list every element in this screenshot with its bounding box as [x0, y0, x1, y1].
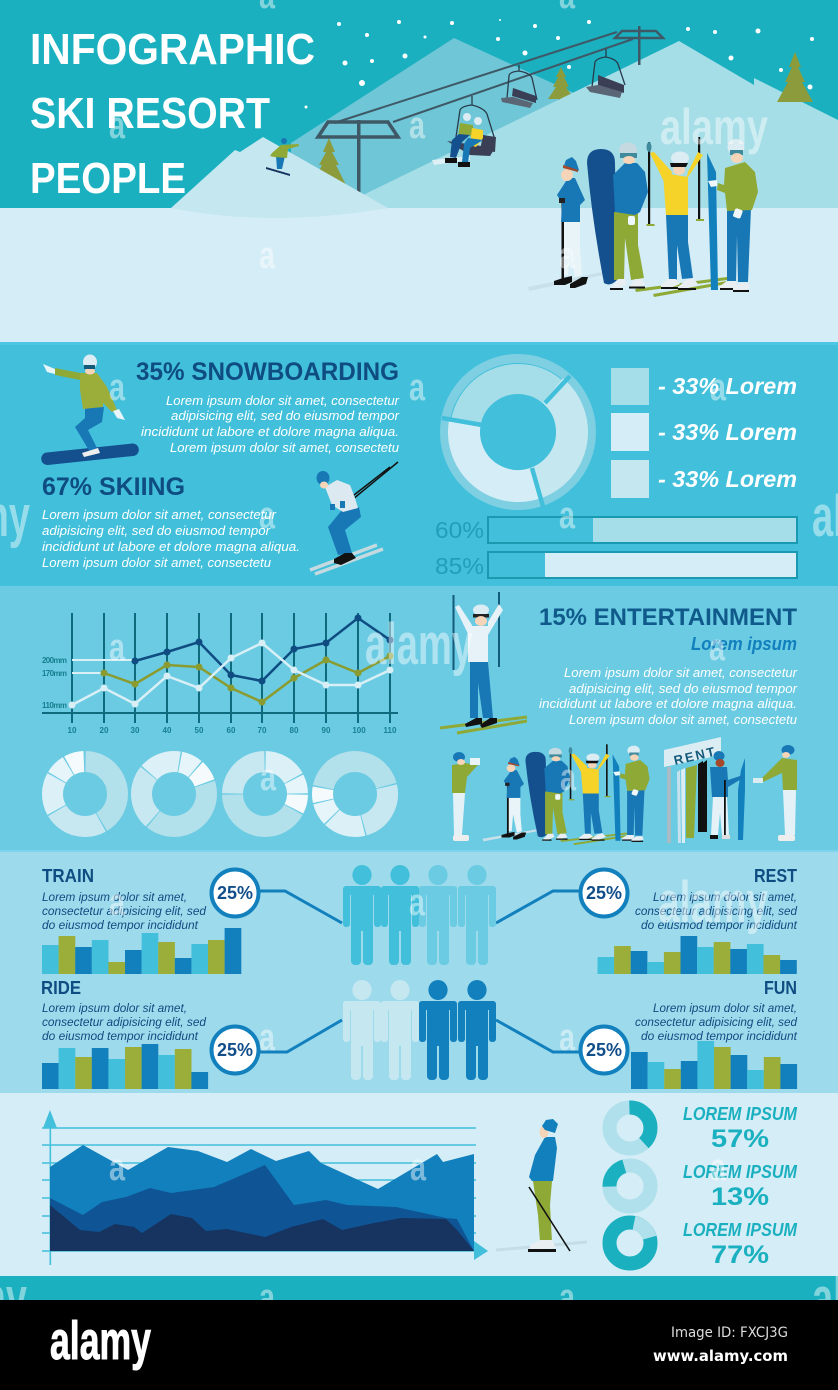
panel: snowboarding and skiing [0, 342, 838, 587]
watermarks: a [109, 105, 126, 147]
block: fun: do eiusmod tempor incididunt [641, 1029, 798, 1043]
skier group [528, 137, 758, 297]
area chart [42, 1110, 488, 1265]
watermarks: a [109, 367, 126, 409]
text block: skiing [42, 508, 300, 570]
block: fun: FUN [764, 977, 797, 998]
watermarks: a [109, 882, 126, 924]
panel: ski resort header [0, 0, 838, 344]
panel: entertainment [0, 586, 838, 851]
text block: skiing: Lorem ipsum dolor sit amet, consectetu [42, 556, 271, 570]
line chart: 20 [100, 726, 109, 735]
watermarks: a [710, 367, 727, 409]
mountains back [291, 38, 838, 208]
progress bars [435, 517, 797, 579]
watermarks: a [559, 235, 576, 277]
image id: Image ID: FXCJ3G [671, 1325, 788, 1341]
progress bars: 60% [435, 517, 484, 543]
text block: skiing: Lorem ipsum dolor sit amet, consectetur [42, 508, 277, 522]
line chart: 60 [227, 726, 236, 735]
illustration: person holding ski [710, 751, 745, 840]
title: SKI RESORT [30, 89, 270, 138]
chart: donut 13% [610, 1166, 650, 1206]
block: train: Lorem ipsum dolor sit amet, [42, 890, 187, 904]
title: INFOGRAPHIC [30, 25, 315, 74]
block: rest: consectetur adipisicing elit, sed [635, 904, 797, 918]
line chart: 40 [163, 726, 172, 735]
text block: skiing: incididunt ut labore et dolore magna aliqua. [42, 540, 300, 554]
illustration: ski rental stand: RENT [672, 744, 718, 768]
watermarks: a [709, 627, 726, 669]
watermarks: alamy [365, 612, 473, 677]
legend: - 33% Lorem [658, 373, 797, 399]
icon: skier [310, 462, 398, 574]
chairlift [318, 26, 663, 192]
block: train: consectetur adipisicing elit, sed [42, 904, 206, 918]
watermarks: a [559, 1017, 576, 1059]
block: fun: Lorem ipsum dolor sit amet, [653, 1001, 797, 1015]
stats: LOREM IPSUM [683, 1162, 798, 1182]
watermarks: a [259, 235, 276, 277]
panel: mountain area chart [0, 1093, 838, 1277]
stats: LOREM IPSUM [683, 1220, 798, 1240]
legend: - 33% Lorem [658, 466, 797, 492]
percentage badges: 25% [586, 883, 622, 903]
watermarks: alamy [660, 99, 768, 155]
heading: skiing: 67% SKIING [42, 473, 185, 501]
stats: LOREM IPSUM [683, 1104, 798, 1124]
logo: alamy [50, 1311, 151, 1371]
block: rest: Lorem ipsum dolor sit amet, [653, 890, 797, 904]
line chart: 10 [68, 726, 77, 735]
block: ride [41, 977, 208, 1089]
line chart: 90 [322, 726, 331, 735]
icon: standing skier [496, 1119, 587, 1252]
connector lines [258, 891, 580, 1052]
heading: entertainment: 15% ENTERTAINMENT [539, 604, 797, 631]
percentage badges: 25% [217, 1040, 253, 1060]
watermarks: a [109, 1147, 126, 1189]
text block: snowboarding: adipisicing elit, sed do eiusmod tempor [171, 409, 400, 423]
block: rest: REST [754, 865, 798, 886]
heading: snowboarding: 35% SNOWBOARDING [136, 358, 399, 386]
legend [611, 368, 797, 498]
block: train [42, 865, 241, 974]
block: fun: consectetur adipisicing elit, sed [635, 1015, 797, 1029]
text block: snowboarding [141, 394, 400, 455]
progress bars: 85% [435, 553, 484, 579]
text block: snowboarding: incididunt ut labore et dolore magna aliqua. [141, 425, 399, 439]
line chart: 50 [195, 726, 204, 735]
line chart: 30 [131, 726, 140, 735]
watermarks: a [409, 882, 426, 924]
line chart: 110 [384, 726, 397, 735]
text block: skiing: adipisicing elit, sed do eiusmod tempor [42, 524, 271, 538]
stats: 57% [711, 1125, 769, 1153]
icon: skier with raised poles [440, 592, 527, 733]
stats: 77% [711, 1241, 769, 1269]
text block: entertainment: Lorem ipsum dolor sit amet, consectetu [569, 713, 797, 727]
watermarks: a [259, 1277, 276, 1319]
illustration: photographer [452, 752, 480, 841]
watermarks: a [259, 495, 276, 537]
percentage badges: 25% [586, 1040, 622, 1060]
panel: train rest ride fun [0, 850, 838, 1094]
block: ride: do eiusmod tempor incididunt [42, 1029, 199, 1043]
illustration: ski rental stand [664, 737, 721, 843]
stats: 13% [711, 1183, 769, 1211]
line chart: 80 [290, 726, 299, 735]
stats [683, 1104, 798, 1269]
text block: entertainment [539, 666, 798, 727]
watermarks: a [559, 1277, 576, 1319]
text block: entertainment: adipisicing elit, sed do eiusmod tempor [569, 682, 798, 696]
people icons lower [343, 980, 496, 1080]
line chart: 170mm [42, 669, 67, 678]
text block: entertainment: Lorem ipsum dolor sit amet, consectetur [564, 666, 798, 680]
watermarks: a [109, 627, 126, 669]
block: train: TRAIN [42, 865, 94, 886]
illustration: ski group [483, 744, 650, 845]
watermarks: a [560, 757, 577, 799]
front mountain [171, 137, 388, 218]
bottom band [0, 1276, 838, 1300]
title [30, 25, 315, 203]
text block: entertainment: incididunt ut labore et dolore magna aliqua. [539, 697, 797, 711]
text block: snowboarding: Lorem ipsum dolor sit amet, consectetu [170, 441, 399, 455]
percentage badges [212, 870, 628, 1074]
small snowboarder [266, 138, 299, 176]
people icons upper [343, 865, 496, 965]
watermarks: a [710, 1147, 727, 1189]
donut charts row [40, 748, 401, 840]
footer bar [0, 1300, 838, 1390]
percentage badges: 25% [217, 883, 253, 903]
watermarks: a [260, 757, 277, 799]
watermarks: alamy [658, 870, 768, 935]
subheading: Lorem ipsum [691, 634, 797, 654]
icon: snowboarder [41, 354, 139, 466]
website: www.alamy.com [653, 1347, 788, 1365]
line chart: 110mm [42, 701, 67, 710]
chart: donut 57% [610, 1108, 650, 1148]
watermarks: a [410, 1147, 427, 1189]
illustration: attendant [753, 745, 797, 841]
block: ride: Lorem ipsum dolor sit amet, [42, 1001, 187, 1015]
block: ride: RIDE [41, 977, 81, 998]
line chart: 100 [352, 726, 366, 735]
line chart [42, 613, 398, 735]
chart: donut with three segments [442, 356, 594, 510]
block: rest: do eiusmod tempor incididunt [641, 918, 798, 932]
title: PEOPLE [30, 154, 186, 203]
watermarks: a [409, 367, 426, 409]
chart: donut 77% [605, 1218, 655, 1268]
block: train: do eiusmod tempor incididunt [42, 918, 199, 932]
line chart: 70 [258, 726, 267, 735]
block: rest [598, 865, 798, 974]
line chart: 200mm [42, 656, 67, 665]
tree behind front mountain [312, 138, 346, 185]
text block: snowboarding: Lorem ipsum dolor sit amet, consectetur [166, 394, 400, 408]
block: ride: consectetur adipisicing elit, sed [42, 1015, 206, 1029]
watermarks: a [409, 105, 426, 147]
block: fun [631, 977, 798, 1089]
watermarks: a [259, 1017, 276, 1059]
watermarks: a [559, 495, 576, 537]
snowflakes [304, 19, 814, 108]
legend: - 33% Lorem [658, 419, 797, 445]
